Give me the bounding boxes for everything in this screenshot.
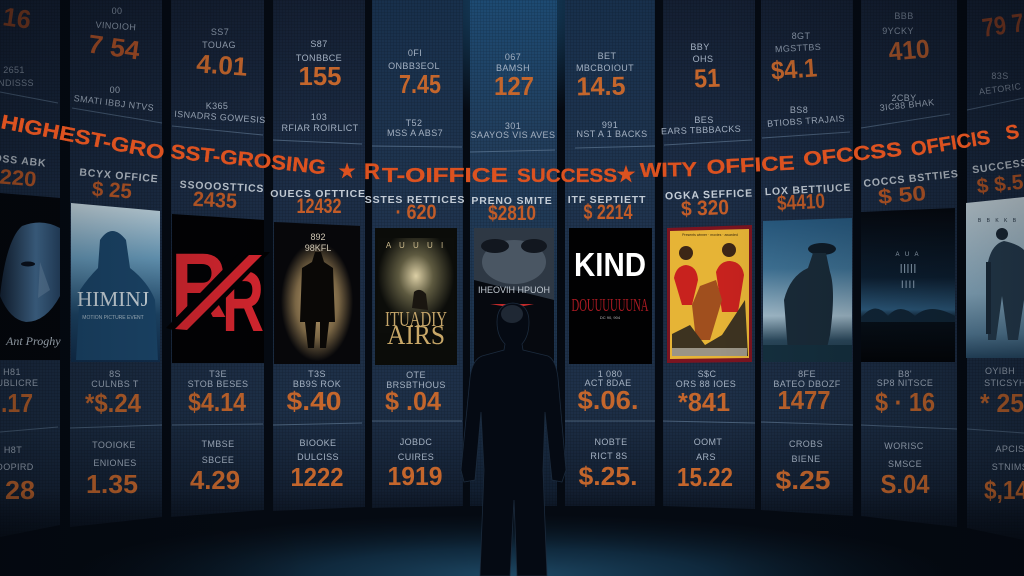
panel: column 3: SSOOOSTTICS [179,179,265,195]
panel: column 9: LOX BETTIUCE [764,182,852,198]
panel: column 2: 8S [109,369,121,379]
panel: column 9: 1477 [778,385,830,415]
panel: column 7: $.25. [578,461,638,491]
title: curved orange headline: OFFICE [706,152,795,179]
panel: column 3: ISNADRS GOWESIS [174,109,266,125]
panel: column 9 [761,0,853,516]
figure: silhouetted man viewing the wall [461,303,566,576]
panel: column 6 (behind the figure): BAMSH [496,63,530,73]
panel: column 5: BRSBTHOUS [386,380,446,390]
title: curved orange headline: S [1004,121,1021,145]
panel: column 4: RFIAR ROIRLICT [281,123,359,133]
panel: column 7: ITF SEPTIETT [568,194,646,206]
panel: column 5: MSS A ABS7 [387,128,443,138]
poster 1: close-up face [0,193,61,360]
panel: column 8: ORS 88 IOES [676,379,736,389]
panel: column 2: 7 54 [86,29,142,66]
poster 10: dark landscape [861,208,955,362]
poster 4: figure in smoke: 892 [310,232,326,242]
panel: column 10: BBB [894,11,914,21]
panel: column 11 (far right): APCIS [995,444,1024,454]
panel: column 4: OUECS OFTTICE [270,188,366,200]
poster 5: golden airs [375,228,457,365]
panel: column 7: NST A 1 BACKS [576,129,648,139]
panel: column 11 (far right) [967,0,1024,540]
panel: column 6 (behind the figure): 301 [505,121,521,131]
panel: column 3: SS7 [211,27,229,37]
panel: column 5 [365,0,465,508]
panel: column 7: BET [598,51,616,61]
panel: column 10: $ · 16 [875,387,935,417]
panel: column 6 (behind the figure) [470,0,557,506]
panel: column 9: BIENE [791,454,821,464]
panel: column 8: OOMT [694,437,722,447]
panel: column 8: OGKA SEFFICE [665,187,753,203]
panel: column 8 [661,0,755,509]
panel: column 4: BIOOKE [300,438,336,448]
panel: column 10: SP8 NITSCE [877,378,933,388]
panel: column 5: JOBDC [400,437,432,447]
panel: column 3: $4.14 [188,387,246,417]
title: curved orange headline: R [364,159,380,184]
poster 5: golden airs: A U U U I [386,241,446,250]
title: curved orange headline: ★ [339,161,356,181]
panel: column 6 (behind the figure): 067 [505,52,521,62]
panel: column 9: BATEO DBOZF [773,379,841,389]
panel: column 4: S87 [310,39,328,49]
panel: column 4: T3S [308,369,326,379]
title: curved orange headline: T-OIFFICE [382,165,508,187]
panel: column 3: 4.29 [190,465,240,495]
panel: column 4: DULCISS [297,452,339,462]
panel: column 9: $.25 [776,465,830,495]
panel: column 8: $ 320 [681,196,729,221]
panel: column 11 (far right): AETORIC [978,81,1022,97]
panel: column 3: 2435 [192,188,238,213]
panel: column 5: ONBB3EOL [388,61,440,71]
poster 10: dark landscape: IIIII [900,261,916,276]
panel: column 9: 8FE [798,369,816,379]
panel: column 1 (far left): .17 [1,388,33,418]
panel: column 2: ENIONES [93,458,137,468]
panel: column 10: 3IC88 BHAK [879,97,935,113]
panel: column 3: 4.01 [196,48,248,82]
panel: column 7: NOBTE [594,437,628,447]
panel: column 4: 103 [311,112,327,122]
panel: column 9: $4410 [776,190,826,215]
panel: column 2: *$.24 [85,388,141,418]
panel: column 8: OHS [693,54,713,64]
title: curved orange headline: ★ [617,164,635,186]
panel: column 9: MGSTTBS [775,42,821,54]
panel: column 2 [70,0,162,527]
panel: column 10: WORISC [884,441,924,451]
panel: column 3 [171,0,266,517]
panel: column 9: 8GT [792,31,810,41]
title: curved orange headline [0,111,1021,187]
panel: column 10: SMSCE [888,459,922,469]
panel: column 2: TOOIOKE [92,440,136,450]
panel: column 5: OTE [406,370,426,380]
poster 3: red logo: R [171,235,227,337]
panel: column 8: ARS [696,452,716,462]
panel: column 8: 15.22 [677,462,733,492]
panel: column 4: $.40 [286,386,342,416]
panel: column 11 (far right): $ $.5 [976,171,1024,198]
panel: column 2: 00 [110,85,120,95]
panel: column 8: BBY [690,42,710,52]
poster 11: man with weapon [966,197,1024,358]
title: curved orange headline: WITY [640,159,698,182]
panel: column 9: CROBS [789,439,823,449]
panel: column 4: TONBBCE [296,53,342,63]
panel: column 6 (behind the figure): $2810 [488,202,536,225]
panel: column 8: 51 [693,63,721,93]
panel: column 11 (far right): OYIBH [985,366,1015,376]
panel: column 8: *841 [678,387,730,417]
poster 6: dark creature face [474,228,554,362]
panel: column 1 (far left): H8T [4,445,22,455]
panel: column 5: 0FI [408,48,422,58]
panel: column 2: BCYX OFFICE [79,167,159,185]
poster 10: dark landscape: A U A [895,252,921,258]
panel: column 3: SBCEE [202,455,234,465]
panel: column 4: 1222 [290,462,344,492]
poster 5: golden airs: ITUADIY [385,307,447,331]
panel: column 7: RICT 8S [590,451,628,461]
panel: column 10: 410 [887,33,931,67]
panel: column 4 [270,0,366,511]
poster 2: HIMIN hooded figure: HIMINJ [77,287,149,311]
panel: column 5: · 620 [396,201,436,224]
poster 11: man with weapon: B B K K B [978,218,1018,224]
panel: column 7: 14.5 [576,71,626,101]
panel: column 6 (behind the figure): SAAYOS VIS AVES [471,130,555,140]
panel: column 7: ACT 8DAE [584,378,632,388]
panel: column 3: K365 [206,101,228,111]
poster 9: man in hat [763,218,852,362]
panel: column 10: 2CBY [891,93,917,103]
title: curved orange headline: HIGHEST-GRO [0,111,166,165]
panel: column 2: VINOIOH [95,20,137,32]
panel: column 11 (far right): 83S [991,71,1009,81]
panel: column 1 (far left): 28 [5,475,35,505]
poster 4: figure in smoke [274,222,360,364]
panel: column 7: MBCBOIOUT [576,63,634,73]
panel: column 2: $ 25 [91,178,133,203]
panel: column 7: $.06. [578,385,638,415]
poster 7: KIND: KIND [574,246,646,283]
panel: column 10: B8' [898,369,912,379]
poster 6: dark creature face: IHEOVIH HPUOH [478,285,550,295]
poster 7: KIND: DC 90, 904 [600,315,621,320]
panel: column 4: 12432 [296,195,342,218]
panel: column 5: 7.45 [399,69,441,99]
panel: column 4: 155 [298,61,342,91]
panel: column 7: $ 2214 [584,201,633,224]
panel: column 2: SMATI IBBJ NTVS [73,93,155,113]
panel: column 8: BES [694,115,714,125]
title: curved orange headline: SST-GROSING [169,141,327,179]
panel: column 7 [565,0,655,506]
panel: column 2: 1.35 [86,469,138,499]
panel: column 4: BB9S ROK [293,379,341,389]
panel: column 10 [861,0,959,527]
panel: column 7: 1 080 [598,369,622,379]
poster 4: figure in smoke: 98KFL [305,243,331,253]
panel: column 2: 00 [112,6,122,16]
panel: column 9: BTIOBS TRAJAIS [767,113,845,129]
panel: column 6 (behind the figure): PRENO SMITE [471,195,553,207]
poster 7: KIND [569,228,652,364]
panel: column 9: BS8 [790,105,808,115]
panel: column 6 (behind the figure): 127 [494,71,534,101]
panel: column 8: EARS TBBBACKS [661,124,741,136]
panel: column 9: $4.1 [770,52,818,86]
title: curved orange headline: OFFICIS [909,127,992,161]
panel: column 10: S.04 [880,469,930,499]
poster 10: dark landscape: IIII [900,279,916,291]
poster 8: yellow comedy poster [667,225,752,363]
panel: column 3: STOB BESES [188,379,248,389]
panel: column 5: CUIRES [398,452,434,462]
panel: column 3: TOUAG [202,40,236,50]
title: curved orange headline: OFCCSS [802,139,903,171]
panel: column 10: $ 50 [877,182,927,209]
poster 5: golden airs: AIRS [387,320,445,350]
panel: column 1 (far left): 2651 [3,65,25,75]
poster 8: yellow comedy poster: Presents winner · movies · awarded [682,233,738,237]
panel: column 5: SSTES RETTICES [365,194,465,206]
panel: column 10: 9YCKY [882,26,914,36]
panel: column 1 (far left): H81 [3,367,21,377]
panel: column 7: 991 [602,120,618,130]
panel: column 3: T3E [209,369,227,379]
poster 1: close-up face: Ant Proghy [5,334,61,348]
panel: column 3: TMBSE [201,439,235,449]
panel: column 2: CULNBS T [91,379,139,389]
poster 3: red logo [166,214,270,363]
poster 2: HIMIN hooded figure: MOTION PICTURE EVENT [82,315,144,321]
panel: column 8: S$C [698,369,716,379]
panel: column 1 (far left): 16 [1,1,33,35]
panel: column 5: $ .04 [385,386,442,416]
poster 2: HIMIN hooded figure [71,203,160,362]
panel: column 5: 1919 [388,461,442,491]
panel: column 10: COCCS BSTTIES [863,168,959,190]
panel: column 1 (far left) [0,0,60,537]
title: curved orange headline: SUCCESS [517,166,617,187]
poster 7: KIND: DOUUUUUUNA [572,295,648,315]
panel: column 5: T52 [406,118,422,128]
poster 3: red logo: R [222,254,264,350]
